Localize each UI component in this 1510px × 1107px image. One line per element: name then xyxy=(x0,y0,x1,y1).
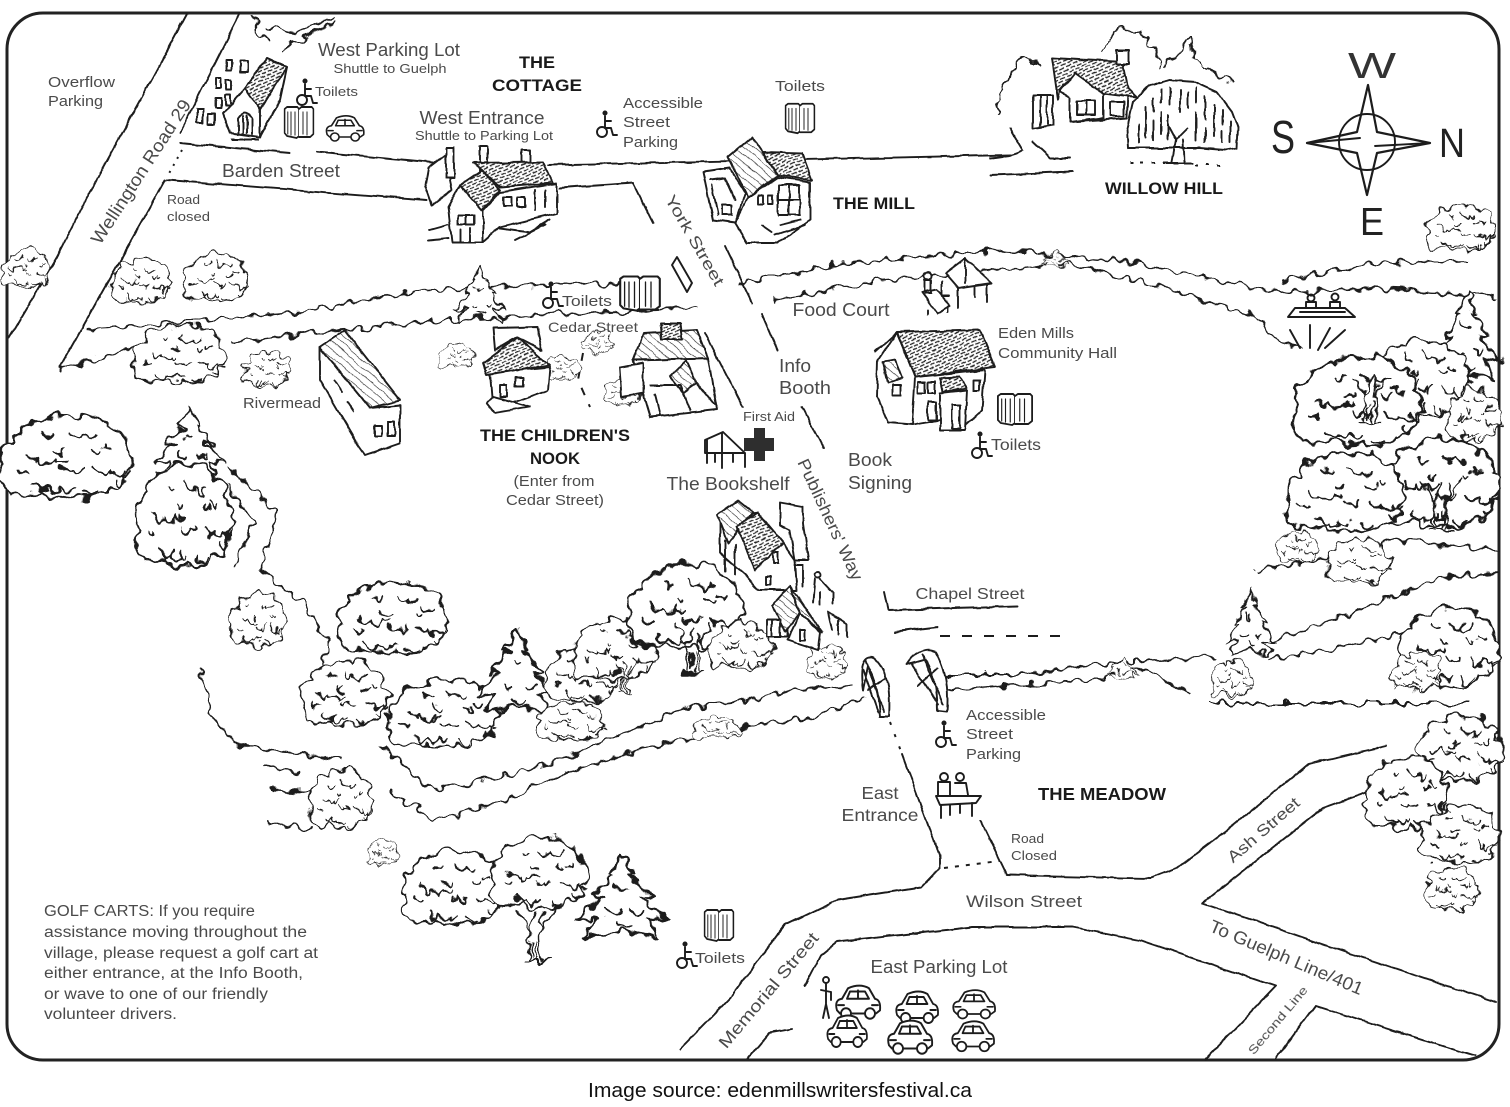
labels: northwest: York Street xyxy=(661,192,727,290)
compass: N xyxy=(1439,120,1465,166)
foliage behind church xyxy=(253,14,333,50)
conifer and river bushes xyxy=(442,249,1139,678)
labels: northwest: Wellington Road 29 xyxy=(87,96,195,248)
labels: centre: (Enter from xyxy=(514,473,594,490)
trees: east woods xyxy=(1212,205,1503,910)
labels: northwest: THE MILL xyxy=(833,194,915,213)
labels: southeast: Toilets xyxy=(695,950,745,967)
labels: centre xyxy=(243,293,1117,603)
labels: southeast: Street xyxy=(966,726,1014,743)
parked cars: East Parking Lot xyxy=(821,977,995,1054)
labels: centre: Book xyxy=(848,450,893,470)
building: Children's Nook xyxy=(483,327,550,413)
labels: southeast: To Guelph Line/401 xyxy=(1206,916,1366,999)
labels: northwest: West Entrance xyxy=(420,108,544,128)
labels: northwest: closed xyxy=(167,209,210,224)
golf carts note: either entrance, at the Info Booth, xyxy=(44,965,303,982)
labels: southeast: Accessible xyxy=(966,707,1046,724)
labels: southeast: Road xyxy=(1011,831,1044,846)
labels: northwest: Parking xyxy=(623,134,678,151)
labels: northwest: Road xyxy=(167,192,200,207)
toilets: west parking lot xyxy=(285,107,313,138)
labels: northwest: Accessible xyxy=(623,95,703,112)
labels: centre: Info xyxy=(779,356,811,376)
labels: centre: The Bookshelf xyxy=(666,474,791,494)
trees: central forest xyxy=(301,563,773,748)
compass: W xyxy=(1348,45,1396,86)
compass: E xyxy=(1360,201,1384,244)
labels: southeast: Closed xyxy=(1011,848,1057,863)
tree: willow xyxy=(1127,80,1238,165)
labels: centre: Eden Mills xyxy=(998,325,1074,342)
first aid cross xyxy=(744,428,774,461)
footbridge at York Street xyxy=(672,257,692,292)
labels: southeast: Entrance xyxy=(842,805,918,825)
labels: northwest xyxy=(48,40,1223,290)
labels: northwest: Toilets xyxy=(775,78,825,95)
labels: centre: Cedar Street xyxy=(548,319,638,335)
labels: northwest: Shuttle to Parking Lot xyxy=(415,128,553,143)
labels: southeast: East xyxy=(862,783,899,803)
building: Cedar Street house xyxy=(620,323,717,417)
labels: centre: Rivermead xyxy=(243,395,321,412)
trees: west woods xyxy=(0,249,399,865)
golf carts note: volunteer drivers. xyxy=(44,1006,177,1023)
labels: northwest: COTTAGE xyxy=(492,76,582,95)
golf carts note xyxy=(44,903,319,1023)
labels: northwest: WILLOW HILL xyxy=(1105,180,1223,198)
toilets: south xyxy=(705,910,733,941)
labels: southeast xyxy=(695,707,1366,1057)
building: Eden Mills Community Hall xyxy=(875,330,995,430)
labels: centre: Cedar Street) xyxy=(506,492,604,509)
labels: centre: First Aid xyxy=(743,409,795,424)
building: Willow Hill house xyxy=(990,28,1233,175)
welcome table with volunteers xyxy=(936,773,981,818)
compass xyxy=(1271,45,1465,244)
labels: centre: Community Hall xyxy=(998,345,1117,362)
labels: centre: Booth xyxy=(779,378,831,398)
golf carts note: or wave to one of our friendly xyxy=(44,986,268,1003)
labels: centre: Chapel Street xyxy=(916,586,1025,603)
labels: centre: Publishers' Way xyxy=(793,456,867,584)
rivers and stream banks xyxy=(60,250,1498,830)
labels: northwest: Shuttle to Guelph xyxy=(334,61,446,76)
building: The Cottage xyxy=(425,146,557,242)
wheelchair icons xyxy=(297,79,992,968)
labels: southeast: Parking xyxy=(966,746,1021,763)
image source caption: Image source: edenmillswritersfestival.ca xyxy=(588,1080,973,1102)
building: Rivermead xyxy=(320,330,400,455)
labels: northwest: Street xyxy=(623,114,671,131)
labels: centre: THE CHILDREN'S xyxy=(480,427,630,445)
labels: southeast: THE MEADOW xyxy=(1038,784,1166,804)
toilets: Cedar Street xyxy=(620,276,660,311)
labels: northwest: Overflow xyxy=(48,74,115,91)
labels: southeast: Memorial Street xyxy=(715,929,823,1052)
building: The Mill xyxy=(703,137,812,243)
labels: northwest: Parking xyxy=(48,93,103,110)
labels: southeast: Wilson Street xyxy=(966,892,1082,911)
labels: southeast: East Parking Lot xyxy=(870,957,1008,977)
building: church xyxy=(197,58,287,139)
labels: centre: Toilets xyxy=(562,293,612,310)
labels: northwest: Toilets xyxy=(315,84,359,99)
bridges xyxy=(862,650,948,717)
dashed road closures xyxy=(167,150,1070,868)
compass: S xyxy=(1271,111,1295,163)
labels: centre: NOOK xyxy=(530,450,580,468)
golf carts note: assistance moving throughout the xyxy=(44,924,307,941)
gazebo and picnic table: Food Court xyxy=(922,258,992,315)
labels: centre: Signing xyxy=(848,473,912,493)
labels: southeast: Ash Street xyxy=(1225,794,1304,867)
labels: northwest: THE xyxy=(519,53,555,72)
toilets: north xyxy=(786,104,814,133)
building: The Bookshelf house xyxy=(717,500,847,650)
golf carts note: GOLF CARTS: If you require xyxy=(44,903,255,920)
toilets: Community Hall xyxy=(998,394,1032,425)
labels: centre: Toilets xyxy=(991,437,1041,454)
labels: southeast: Second Line xyxy=(1245,983,1311,1057)
tent: The Bookshelf xyxy=(705,432,745,468)
labels: northwest: Barden Street xyxy=(222,161,340,181)
golf carts note: village, please request a golf cart at xyxy=(44,945,319,962)
boat with two people xyxy=(1288,294,1355,350)
car at West Parking Lot xyxy=(326,116,364,141)
labels: northwest: West Parking Lot xyxy=(318,40,460,60)
trees: south woods xyxy=(403,836,667,961)
labels: centre: Food Court xyxy=(792,300,890,320)
